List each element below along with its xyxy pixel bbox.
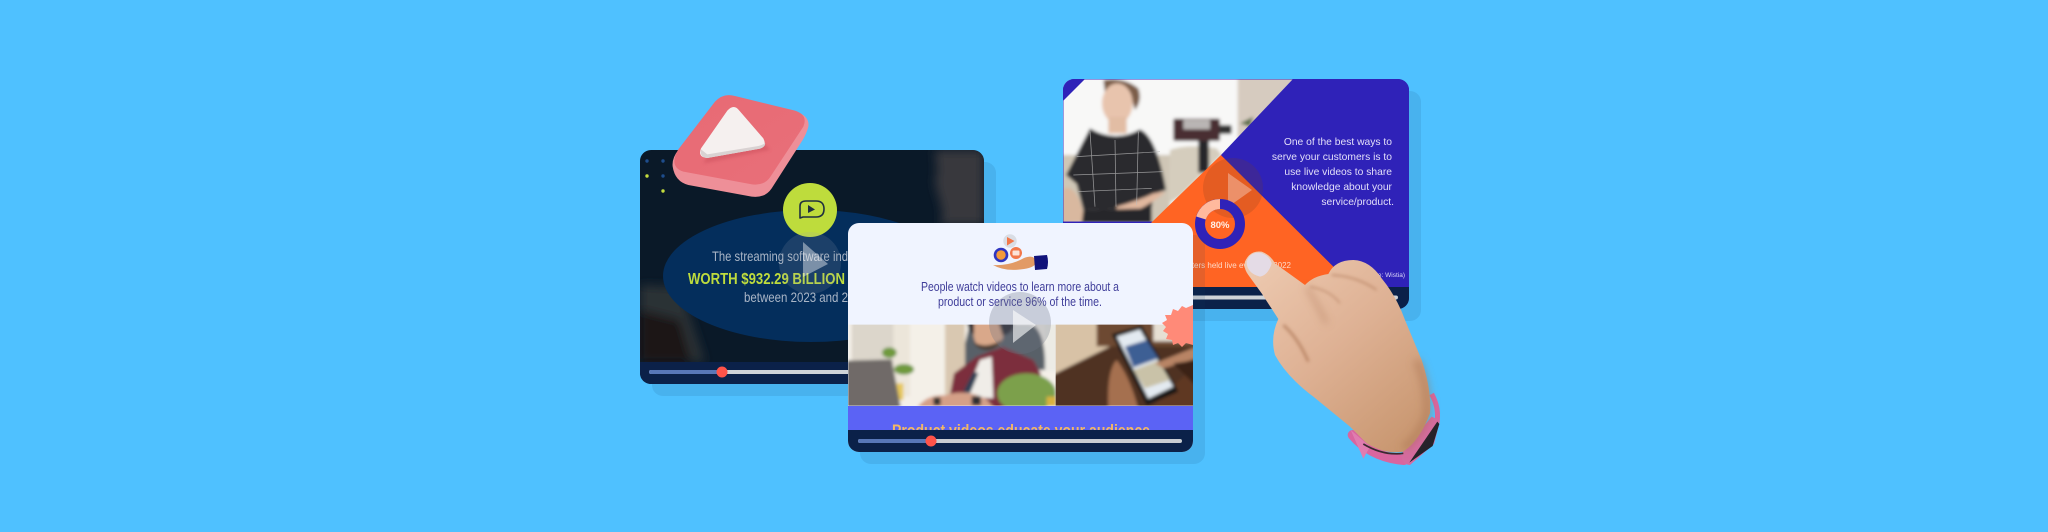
band heading, clipped by the control bar: Product videos educate your audience [892,422,1150,440]
card shadow [652,162,996,396]
progress track [1193,296,1398,300]
progress track [858,436,1182,446]
panel: streaming software card [640,150,996,396]
panel: live video card [1060,76,1421,321]
wristband [1351,394,1440,465]
card body [1060,76,1409,309]
live video copy: service/product. [1321,197,1394,208]
live video copy: serve your customers is to [1272,152,1392,163]
play overlay [779,232,841,294]
orange triangle [1151,155,1334,287]
hand creases [1283,275,1377,362]
card text: The streaming software ind [712,248,848,264]
progress track [649,366,848,378]
donut chart 80% [1200,204,1240,244]
dark photo: face [640,150,984,362]
icon: starburst [1162,305,1193,347]
icon: lime play badge [783,183,837,237]
live video copy: use live videos to share [1284,167,1392,178]
hand shape [1245,251,1430,452]
card text: between 2023 and 2 [744,289,848,305]
live video copy [1272,137,1394,208]
card body [845,223,1197,452]
purple panel [1221,79,1409,287]
oval [663,211,899,342]
photo: hand holding phone [1056,324,1193,406]
control bar [848,430,1193,452]
play triangle [700,107,765,158]
stat caption: Marketers held live events in 2022 [1170,261,1292,270]
card text: WORTH $932.29 BILLION [688,271,845,288]
hand shading [1307,287,1427,448]
icon: 3D red play button [673,95,809,197]
decorative dots [645,159,665,193]
triangle shadow [703,110,770,163]
card shadow [1075,91,1421,321]
control bar [640,362,848,384]
play overlay [989,292,1051,354]
button side [673,96,809,197]
panel: product videos card [845,223,1205,464]
icon: 3D pointing hand with pink wristband [1245,251,1440,465]
card shadow [860,235,1205,464]
card copy: product or service 96% of the time. [938,294,1102,309]
purple title band [848,406,1193,430]
card copy [922,282,1119,308]
icon: hand holding social buttons [993,234,1048,270]
source: (Source: Wistia) [1359,272,1405,279]
live video copy: One of the best ways to [1284,137,1392,148]
purple corner [1063,79,1085,101]
live video copy: knowledge about your [1291,182,1393,193]
play overlay [1203,158,1263,218]
button top face [674,95,805,185]
photo: man at laptop [848,324,1056,406]
donut chart 80%: 80% [1210,220,1230,231]
card body [640,150,984,384]
photo: woman with phone on gimbal [1060,76,1300,226]
card copy: People watch videos to learn more about a [921,279,1120,294]
fingernail [1247,253,1272,277]
control bar [1193,287,1409,309]
card text [688,251,848,302]
